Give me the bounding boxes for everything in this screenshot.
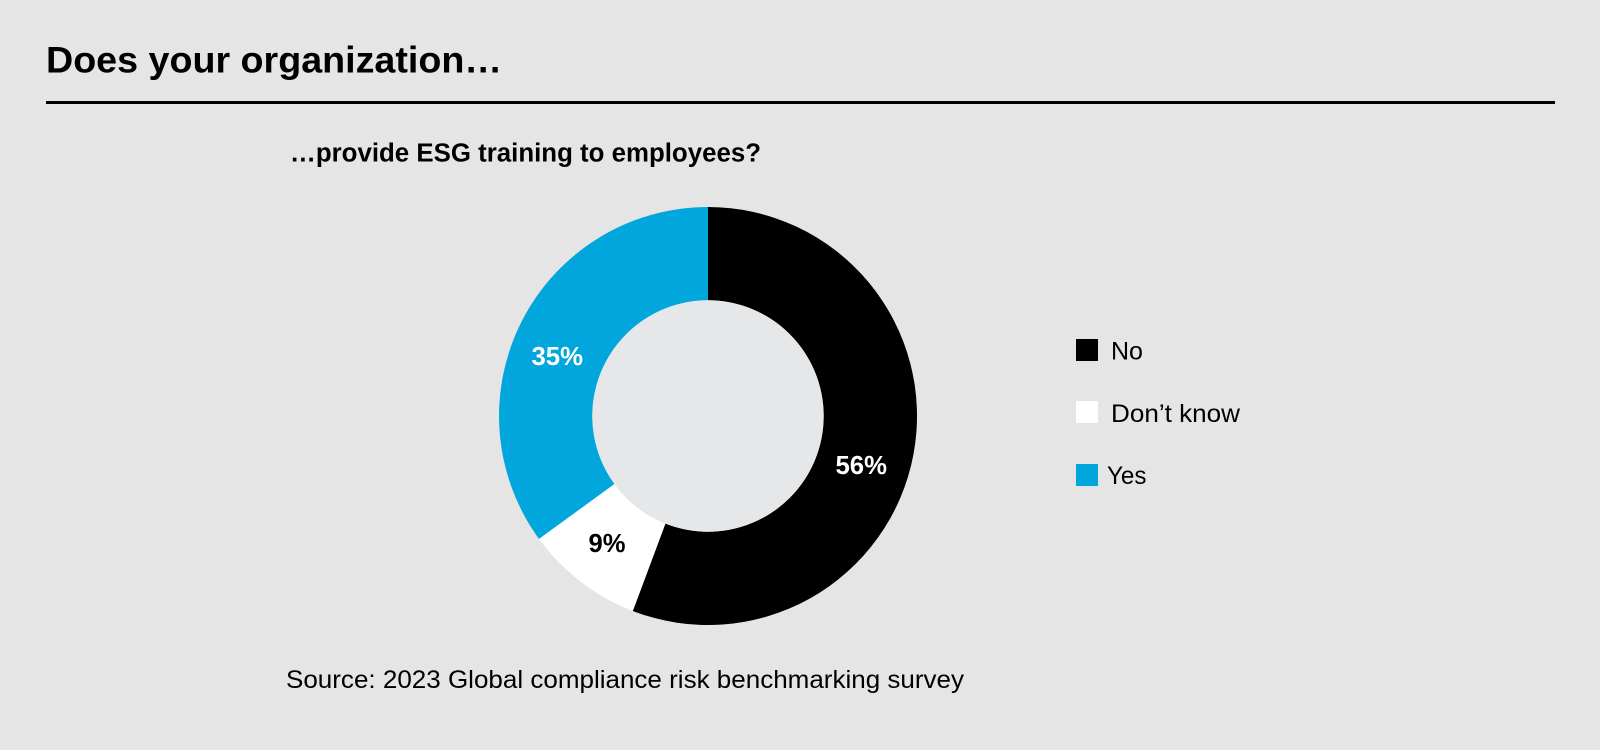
value label: 35%: 35% (532, 343, 583, 371)
value label: 9%: 9% (588, 530, 626, 558)
legend item: Don't know: Don’t know (1111, 400, 1241, 428)
legend item: No: No (1111, 338, 1143, 366)
segment: No 56% (633, 207, 917, 625)
title: Does your organization… (46, 38, 502, 80)
segment: Don't know 9% (539, 484, 665, 611)
legend item: Yes: Yes (1107, 462, 1146, 490)
subtitle: survey question: …provide ESG training to employees? (290, 140, 761, 168)
legend item: Yes (1076, 462, 1146, 490)
donut hole (592, 300, 824, 532)
donut chart (499, 207, 917, 625)
legend (1076, 338, 1241, 490)
source note: Source: 2023 Global compliance risk benchmarking survey (286, 666, 965, 694)
legend item: No (1076, 338, 1143, 366)
value label: 56%: 56% (836, 452, 887, 480)
segment: Yes 35% (499, 207, 708, 539)
